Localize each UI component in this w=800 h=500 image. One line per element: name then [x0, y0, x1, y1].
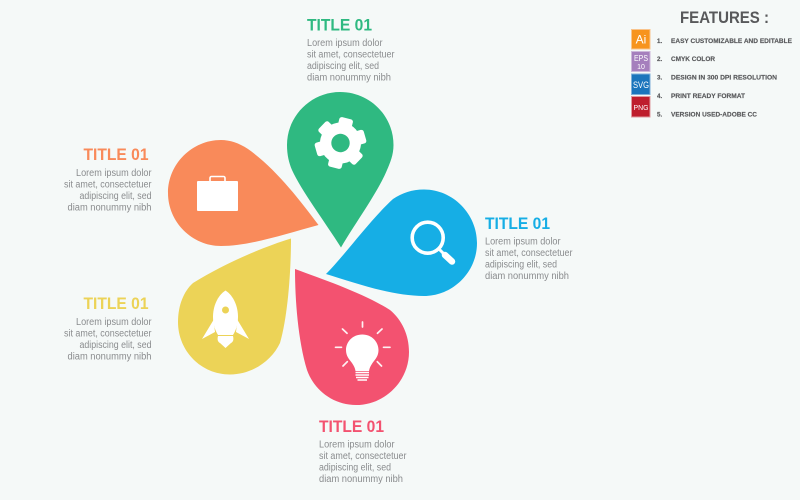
features list: 5.: [657, 112, 662, 118]
text block: green: TITLE 01: [307, 16, 372, 34]
icon: light bulb: [336, 322, 390, 380]
icon: briefcase: [197, 176, 238, 211]
text block: green: diam nonummy nibh: [307, 72, 391, 84]
features list: EASY CUSTOMIZABLE AND EDITABLE: [671, 38, 792, 45]
features list: PRINT READY FORMAT: [671, 93, 745, 100]
features list: DESIGN IN 300 DPI RESOLUTION: [671, 74, 778, 82]
text block: yellow: Lorem ipsum dolor: [76, 317, 152, 328]
file format icons: EPS: [634, 54, 648, 63]
petal: yellow with rocket: [178, 238, 291, 374]
features list: VERSION USED-ADOBE CC: [671, 112, 758, 118]
file format icons: 10: [637, 64, 645, 71]
file format icons: Ai: [636, 32, 646, 46]
petal: red with light bulb: [295, 269, 409, 405]
text block: orange: diam nonummy nibh: [68, 202, 152, 214]
text block: red: [319, 417, 407, 485]
text block: yellow: TITLE 01: [84, 294, 148, 313]
panel: features: [632, 8, 792, 118]
text block: green: [307, 16, 395, 84]
text block: red: Lorem ipsum dolor: [319, 440, 395, 450]
text block: red: diam nonummy nibh: [319, 474, 403, 485]
file format icons: PNG: [634, 103, 649, 112]
text block: orange: sit amet, consectetuer: [64, 180, 152, 190]
text block: yellow: adipiscing elit, sed: [80, 340, 152, 351]
text block: orange: TITLE 01: [84, 145, 148, 164]
text block: orange: [64, 145, 152, 214]
file format icons: [632, 30, 650, 117]
text block: yellow: [64, 294, 152, 362]
text block: yellow: sit amet, consectetuer: [64, 328, 152, 340]
icon: gear: [310, 112, 371, 174]
text block: green: sit amet, consectetuer: [307, 50, 395, 60]
petal: blue with magnifier: [326, 190, 477, 296]
text block: red: sit amet, consectetuer: [319, 451, 407, 462]
text block: blue: diam nonummy nibh: [485, 271, 569, 282]
text block: orange: adipiscing elit, sed: [80, 191, 152, 202]
text block: green: Lorem ipsum dolor: [307, 38, 383, 49]
text block: blue: TITLE 01: [485, 214, 550, 233]
features list: CMYK COLOR: [671, 56, 716, 63]
icon: magnifier: [412, 222, 452, 262]
features list: 1.: [657, 38, 662, 45]
text block: green: adipiscing elit, sed: [307, 61, 379, 72]
features list: 2.: [657, 56, 662, 63]
features list: 4.: [657, 93, 662, 100]
text block: blue: sit amet, consectetuer: [485, 248, 573, 259]
text block: orange: Lorem ipsum dolor: [76, 168, 152, 179]
petal: green with gear: [287, 92, 394, 248]
text block: red: TITLE 01: [319, 417, 384, 436]
text block: blue: [485, 214, 573, 282]
text block: blue: adipiscing elit, sed: [485, 260, 557, 270]
icon: rocket: [202, 290, 249, 348]
features heading: FEATURES :: [680, 8, 769, 27]
text block: blue: Lorem ipsum dolor: [485, 236, 561, 248]
features list: [657, 38, 792, 118]
text block: red: adipiscing elit, sed: [319, 462, 391, 474]
file format icons: SVG: [633, 80, 649, 91]
petal: orange with briefcase: [168, 140, 318, 246]
features list: 3.: [657, 74, 662, 82]
text block: yellow: diam nonummy nibh: [68, 352, 152, 362]
